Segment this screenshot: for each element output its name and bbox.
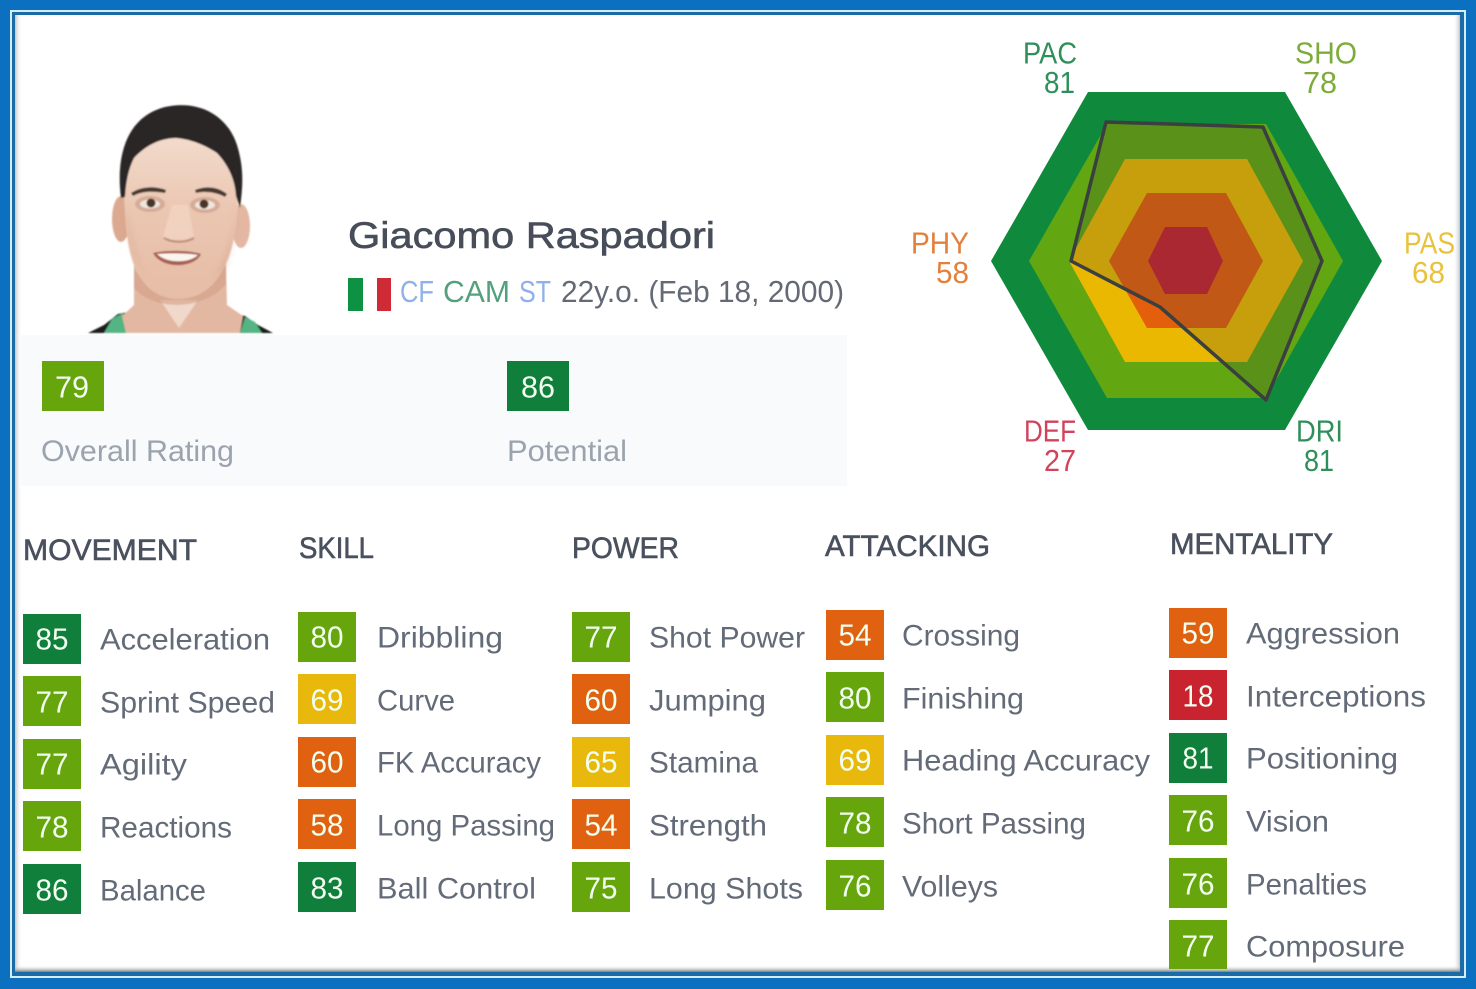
stat: long passing: Long Passing xyxy=(377,809,555,842)
stat: short passing: 78 xyxy=(838,805,872,840)
stat: interceptions: Interceptions xyxy=(1246,680,1426,713)
stat: long shots: Long Shots xyxy=(649,872,803,905)
stat: vision: 76 xyxy=(1182,803,1214,838)
stat: interceptions xyxy=(1169,670,1426,720)
stat: ball control: Ball Control xyxy=(377,872,536,905)
stat: long shots xyxy=(572,862,803,912)
heading: attacking: ATTACKING xyxy=(825,530,990,563)
stat: penalties: Penalties xyxy=(1246,868,1367,901)
player stat polygon xyxy=(1071,122,1322,400)
player meta line: CF xyxy=(400,274,434,309)
stat: finishing xyxy=(826,672,1024,722)
stat: composure: 77 xyxy=(1182,928,1214,963)
stat: fk accuracy xyxy=(298,737,541,787)
heading: power: POWER xyxy=(572,532,679,565)
player name: Giacomo Raspadori xyxy=(348,215,715,256)
stat: volleys: Volleys xyxy=(902,870,998,903)
stat: vision: Vision xyxy=(1246,805,1329,838)
player meta line xyxy=(348,274,844,311)
stat: penalties xyxy=(1169,858,1367,908)
stat: crossing: Crossing xyxy=(902,619,1020,652)
potential: Potential xyxy=(507,435,627,468)
icon: italian flag xyxy=(348,278,391,311)
stat: acceleration xyxy=(23,614,270,664)
stat: volleys xyxy=(826,860,998,910)
stat: sprint speed: Sprint Speed xyxy=(100,686,275,719)
stat: aggression: 59 xyxy=(1182,615,1214,650)
heading: movement: MOVEMENT xyxy=(23,534,197,567)
stat: reactions: 78 xyxy=(36,809,68,844)
stat: positioning xyxy=(1169,733,1398,783)
radar label: PHY xyxy=(911,225,969,290)
stat: sprint speed xyxy=(23,676,275,726)
stat: acceleration: Acceleration xyxy=(100,623,270,656)
stat: crossing xyxy=(826,610,1020,660)
radar label: SHO: SHO xyxy=(1295,35,1357,70)
eyes xyxy=(140,200,160,208)
stat: aggression xyxy=(1169,608,1400,658)
stat: reactions xyxy=(23,801,232,851)
stat: positioning: Positioning xyxy=(1246,742,1398,775)
stat: stamina: Stamina xyxy=(649,746,758,779)
stat: heading accuracy: 69 xyxy=(838,742,872,777)
stat: dribbling: 80 xyxy=(310,619,344,654)
radar label: PAS: PAS xyxy=(1404,225,1455,260)
panel: movement xyxy=(23,534,275,914)
stat: curve: 69 xyxy=(310,682,344,717)
stat: agility: Agility xyxy=(100,748,187,781)
overall rating: Overall Rating xyxy=(41,435,234,468)
stat: jumping xyxy=(572,674,766,724)
stat: shot power xyxy=(572,612,805,662)
potential xyxy=(507,361,627,468)
radar label: PAC: 81 xyxy=(1044,65,1075,100)
radar label: DEF: 27 xyxy=(1044,443,1076,478)
stat: stamina: 65 xyxy=(584,744,618,779)
stat: agility: 77 xyxy=(36,746,68,781)
panel: skill xyxy=(298,532,555,912)
stat: volleys: 76 xyxy=(838,868,872,903)
stat: balance: 86 xyxy=(36,872,68,907)
stat: composure: Composure xyxy=(1246,930,1405,963)
shirt xyxy=(88,311,273,333)
radar label: PAC: PAC xyxy=(1023,35,1077,70)
stat: stamina xyxy=(572,737,758,787)
radar label: DRI xyxy=(1296,413,1343,478)
heading: mentality: MENTALITY xyxy=(1170,528,1333,561)
radar label: PHY: 58 xyxy=(936,255,969,290)
stat: composure xyxy=(1169,920,1405,969)
radar label: DEF: DEF xyxy=(1024,413,1076,448)
stat: dribbling xyxy=(298,612,503,662)
stat: curve: Curve xyxy=(377,684,455,717)
radar label: SHO xyxy=(1295,35,1357,100)
stat: dribbling: Dribbling xyxy=(377,621,503,654)
panel: ratings xyxy=(21,335,847,486)
stat: balance: Balance xyxy=(100,874,206,907)
eyebrows xyxy=(131,187,227,197)
stat: finishing: 80 xyxy=(838,680,872,715)
stat: heading accuracy xyxy=(826,735,1150,785)
stat: shot power: 77 xyxy=(584,619,618,654)
stat: jumping: Jumping xyxy=(649,684,766,717)
ears xyxy=(112,196,130,242)
stat: penalties: 76 xyxy=(1182,866,1214,901)
stat: ball control: 83 xyxy=(310,870,344,905)
stat: acceleration: 85 xyxy=(36,621,68,656)
nose xyxy=(163,205,194,240)
stat: long passing xyxy=(298,799,555,849)
mouth xyxy=(153,251,201,265)
stat: agility xyxy=(23,739,187,789)
stat: fk accuracy: 60 xyxy=(310,744,344,779)
radar label: PAS xyxy=(1404,225,1455,290)
radar chart xyxy=(911,35,1455,478)
player meta line: ST xyxy=(519,274,551,309)
stat: finishing: Finishing xyxy=(902,682,1024,715)
stat: curve xyxy=(298,674,455,724)
stat: strength xyxy=(572,799,767,849)
radar label: DRI: DRI xyxy=(1296,413,1343,448)
radar label: PAC xyxy=(1023,35,1077,100)
hexagon bands xyxy=(991,92,1382,430)
stat: strength: 54 xyxy=(584,807,618,842)
overall rating: 79 xyxy=(55,369,89,404)
panel: attacking xyxy=(825,530,1150,910)
stat: jumping: 60 xyxy=(584,682,618,717)
stat: heading accuracy: Heading Accuracy xyxy=(902,744,1150,777)
face side shading xyxy=(126,205,236,282)
panel: mentality xyxy=(1169,528,1426,969)
stat: positioning: 81 xyxy=(1182,740,1214,775)
stat: short passing: Short Passing xyxy=(902,807,1086,840)
player meta line: 22y.o. (Feb 18, 2000) xyxy=(561,274,844,309)
radar label: SHO: 78 xyxy=(1303,65,1337,100)
stat: reactions: Reactions xyxy=(100,811,232,844)
stat: long shots: 75 xyxy=(584,870,618,905)
hair xyxy=(120,105,242,208)
stat: sprint speed: 77 xyxy=(36,684,68,719)
stat: aggression: Aggression xyxy=(1246,617,1400,650)
overall rating xyxy=(41,361,234,468)
stat: long passing: 58 xyxy=(310,807,344,842)
stat: strength: Strength xyxy=(649,809,767,842)
player portrait xyxy=(88,105,273,333)
stat: fk accuracy: FK Accuracy xyxy=(377,746,541,779)
potential: 86 xyxy=(521,369,555,404)
stat: shot power: Shot Power xyxy=(649,621,805,654)
stat: interceptions: 18 xyxy=(1182,678,1214,713)
eye sockets xyxy=(135,196,165,212)
face xyxy=(124,132,238,299)
radar label: PHY: PHY xyxy=(911,225,969,260)
radar label: PAS: 68 xyxy=(1412,255,1445,290)
stat: short passing xyxy=(826,797,1086,847)
radar label: DEF xyxy=(1024,413,1076,478)
stat: crossing: 54 xyxy=(838,617,872,652)
panel: power xyxy=(572,532,805,912)
stat: balance xyxy=(23,864,206,914)
radar label: DRI: 81 xyxy=(1304,443,1334,478)
neck xyxy=(122,265,243,333)
stat: vision xyxy=(1169,795,1329,845)
heading: skill: SKILL xyxy=(299,532,374,565)
player meta line: CAM xyxy=(443,274,510,309)
stat: ball control xyxy=(298,862,536,912)
